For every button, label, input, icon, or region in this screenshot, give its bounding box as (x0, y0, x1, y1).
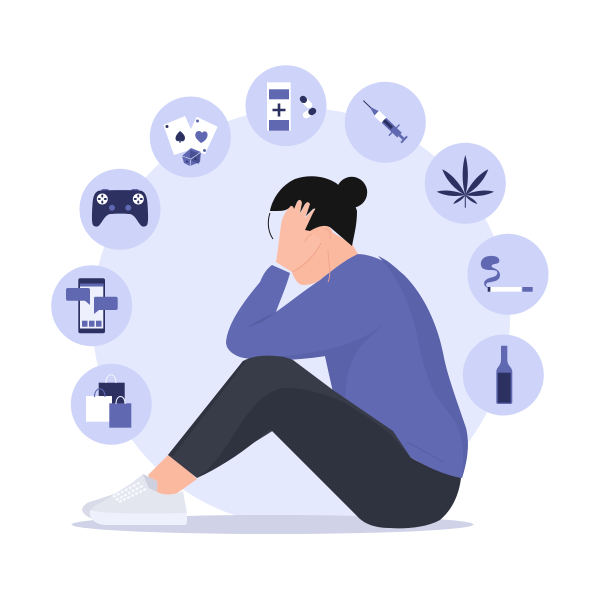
icon: wine bottle (463, 334, 544, 416)
hair (268, 176, 367, 246)
ear detail (324, 229, 330, 239)
icon: playing cards and die (150, 96, 231, 178)
figure: seated woman (82, 176, 468, 528)
back shoe (82, 492, 140, 525)
icon: phone with chat bubbles (51, 265, 132, 346)
background circle (92, 108, 510, 526)
icon: syringe (345, 82, 426, 163)
icon: medicine bottle and pills (246, 65, 326, 146)
hand over face (276, 200, 321, 272)
icon: shopping bags (71, 364, 152, 445)
icon: cannabis leaf (425, 143, 506, 224)
near leg (197, 388, 461, 528)
floor shadow (72, 515, 474, 534)
icon: game controller (80, 169, 160, 250)
face crease lines (292, 234, 330, 282)
ear (322, 226, 333, 246)
neck and face (285, 225, 358, 285)
icon: cigarette with smoke (468, 234, 548, 315)
sweater (226, 254, 468, 478)
far leg (168, 356, 411, 478)
front shoe (90, 474, 187, 525)
far leg edge (168, 361, 246, 456)
ankle and foot skin (148, 455, 197, 495)
